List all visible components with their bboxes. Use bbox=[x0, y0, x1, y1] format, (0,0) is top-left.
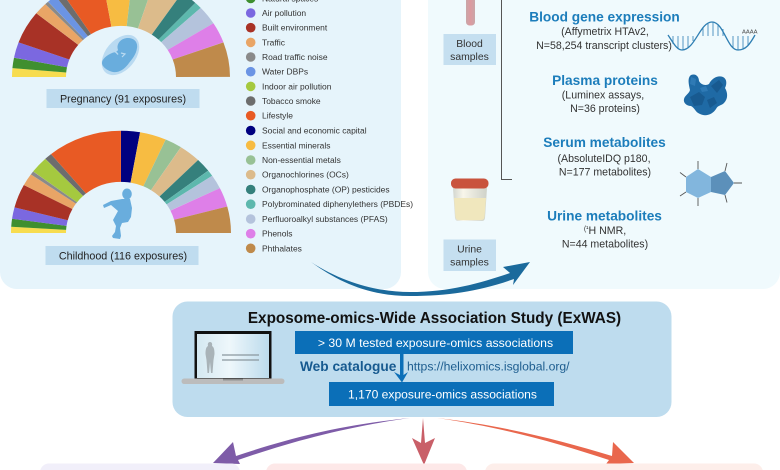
legend: exposure groups: Essential minerals bbox=[262, 140, 330, 150]
text: plasma proteins: Plasma proteins bbox=[552, 73, 658, 88]
legend: exposure groups: Tobacco smoke bbox=[262, 96, 321, 106]
title: ExWAS: Exposome-omics-Wide Association Study (ExWAS) bbox=[248, 310, 621, 327]
chart: pregnancy exposure semicircle bbox=[5, 0, 237, 185]
label: urine samples: samples bbox=[450, 258, 489, 268]
arrow: to right box bbox=[437, 418, 634, 464]
legend: exposure groups: Water DBPs bbox=[262, 67, 308, 77]
legend: exposure groups: Non-essential metals bbox=[262, 155, 341, 165]
icon: urine jar bbox=[451, 178, 488, 221]
label: pregnancy bbox=[46, 89, 200, 108]
text: blood gene expression: N=58,254 transcript clusters) bbox=[536, 40, 672, 52]
label: blood samples: Blood bbox=[456, 39, 483, 50]
label: urine samples: Urine bbox=[457, 244, 482, 256]
box: tested associations: > 30 M tested exposure-omics associations bbox=[318, 336, 553, 350]
icon: RNA wave: AAAA bbox=[742, 30, 758, 36]
icon: running child bbox=[103, 188, 132, 239]
text: urine metabolites: Urine metabolites bbox=[547, 208, 662, 224]
text: urine metabolites bbox=[547, 208, 662, 250]
legend: exposure groups: Perfluoroalkyl substances (PFAS) bbox=[262, 214, 388, 224]
text: serum metabolites bbox=[543, 135, 666, 178]
text: urine metabolites: (¹ bbox=[584, 226, 589, 233]
legend: exposure groups bbox=[246, 0, 413, 253]
text: web catalogue: https://helixomics.isglobal.org/ bbox=[407, 360, 570, 374]
icon: fetus bbox=[94, 28, 147, 82]
text: blood gene expression: (Affymetrix HTAv2, bbox=[561, 26, 649, 38]
arrow: to left box bbox=[213, 418, 410, 464]
label: childhood bbox=[46, 246, 198, 265]
icon: RNA wave bbox=[668, 22, 758, 50]
panel: bottom centre bbox=[266, 464, 467, 470]
text: plasma proteins: (Luminex assays, bbox=[562, 90, 644, 102]
panel: exposome bbox=[0, 0, 413, 342]
box: tested associations bbox=[295, 331, 573, 354]
box: significant associations: 1,170 exposure-omics associations bbox=[348, 388, 537, 402]
box: significant associations bbox=[329, 382, 554, 406]
icon: blood tube bbox=[466, 0, 475, 26]
text: web catalogue bbox=[300, 359, 570, 374]
label: blood samples: samples bbox=[450, 52, 489, 63]
panel: ExWAS bbox=[172, 302, 672, 417]
legend: exposure groups: Traffic bbox=[262, 37, 285, 47]
text: plasma proteins: N=36 proteins) bbox=[570, 103, 640, 115]
text: blood gene expression: Blood gene expression bbox=[529, 10, 680, 24]
panel: bottom right bbox=[485, 464, 763, 470]
text: urine metabolites: H NMR, bbox=[588, 225, 626, 237]
legend: exposure groups: Road traffic noise bbox=[262, 52, 328, 62]
label: blood samples bbox=[444, 34, 496, 65]
text: plasma proteins bbox=[552, 73, 658, 115]
icon: laptop bbox=[182, 331, 284, 384]
label: urine samples bbox=[444, 240, 496, 271]
legend: exposure groups: Polybrominated diphenylethers (PBDEs) bbox=[262, 199, 413, 209]
text: serum metabolites: N=177 metabolites) bbox=[559, 166, 651, 178]
legend: exposure groups: Organochlorines (OCs) bbox=[262, 170, 349, 180]
text: serum metabolites: (AbsoluteIDQ p180, bbox=[557, 153, 651, 165]
text: urine metabolites: N=44 metabolites) bbox=[562, 238, 648, 250]
chart: childhood exposure semicircle bbox=[4, 124, 238, 342]
connector: blood sample bracket bbox=[502, 0, 512, 180]
legend: exposure groups: Built environment bbox=[262, 23, 328, 33]
panel: bottom left bbox=[40, 464, 240, 470]
icon: metabolite molecule bbox=[680, 161, 742, 206]
legend: exposure groups: Phenols bbox=[262, 229, 292, 239]
text: serum metabolites: Serum metabolites bbox=[543, 135, 666, 150]
icon: protein bbox=[684, 74, 727, 115]
legend: exposure groups: Air pollution bbox=[262, 8, 306, 18]
legend: exposure groups: Phthalates bbox=[262, 243, 302, 253]
text: blood gene expression bbox=[529, 10, 680, 52]
arrow: tested to significant bbox=[394, 354, 408, 382]
legend: exposure groups: Organophosphate (OP) pesticides bbox=[262, 184, 390, 194]
legend: exposure groups: Lifestyle bbox=[262, 111, 293, 121]
legend: exposure groups: Indoor air pollution bbox=[262, 81, 332, 91]
arrow: exposome to omics bbox=[311, 262, 530, 296]
arrow: to centre box bbox=[412, 418, 435, 465]
label: pregnancy: Pregnancy (91 exposures) bbox=[60, 94, 186, 106]
text: web catalogue: Web catalogue bbox=[300, 359, 397, 374]
panel: omics bbox=[428, 0, 780, 289]
legend: exposure groups: Social and economic capital bbox=[262, 126, 367, 136]
label: childhood: Childhood (116 exposures) bbox=[59, 250, 187, 262]
